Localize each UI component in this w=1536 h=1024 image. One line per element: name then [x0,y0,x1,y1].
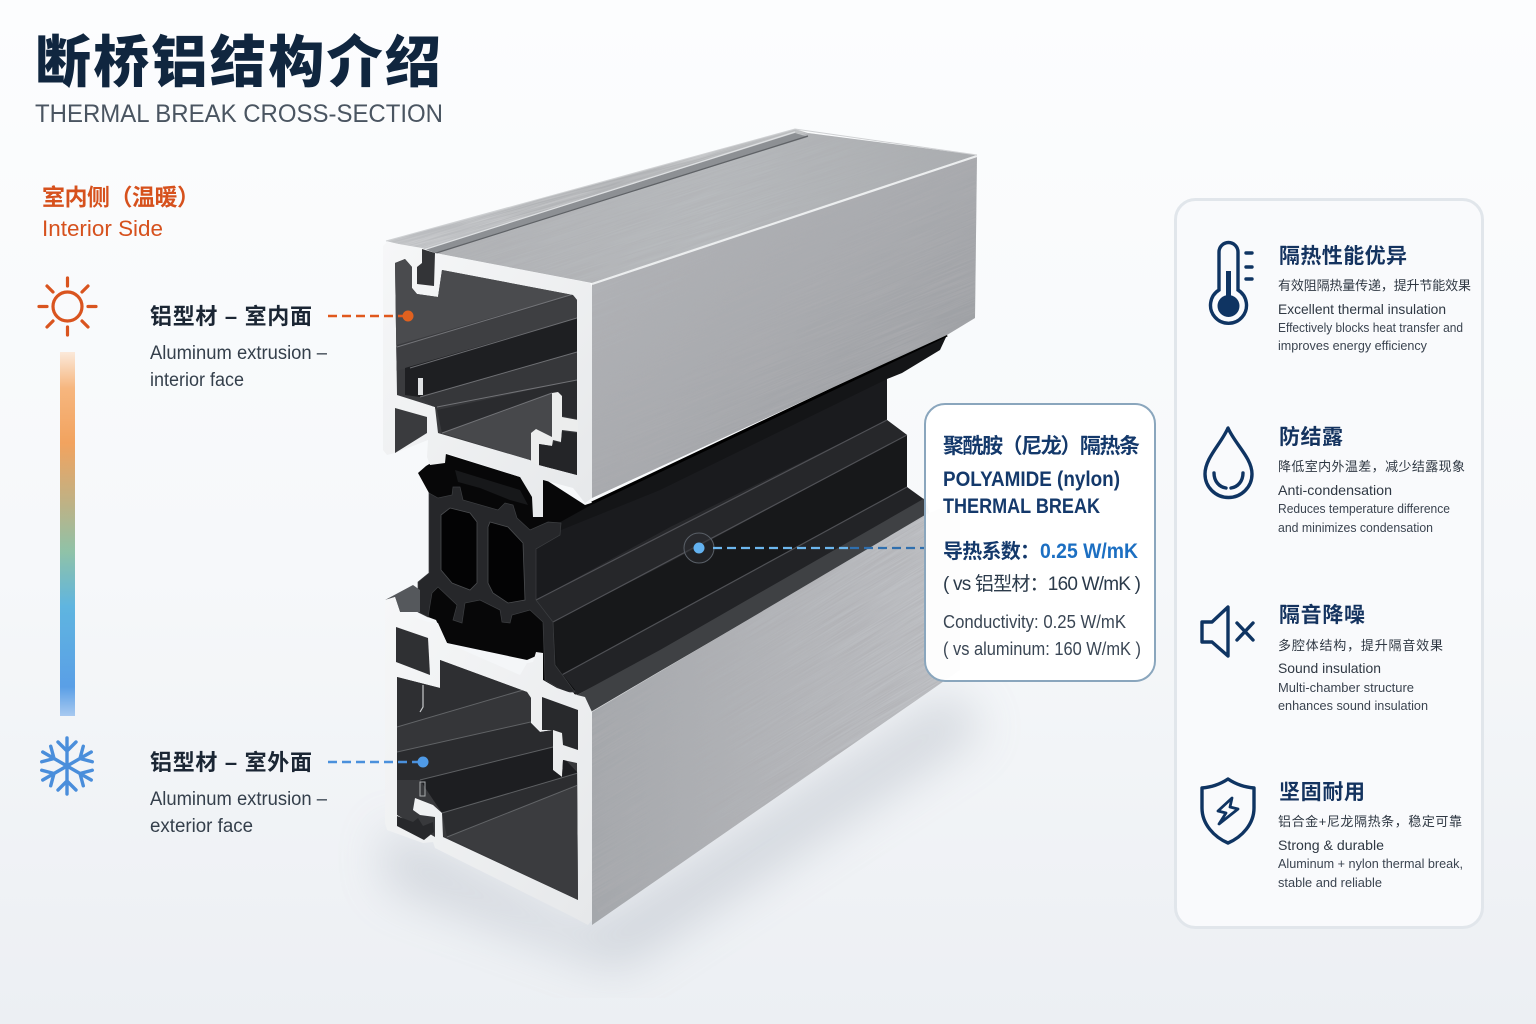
item: thermal insulation: 隔热性能优异 [1279,245,1407,268]
callout English heading [943,468,1120,518]
temperature gradient bar [60,352,75,716]
upper T post [531,392,578,466]
item: thermal insulation: improves energy efficiency [1278,339,1428,353]
interior side heading: Interior Side [42,216,163,241]
callout conductivity: 导热系数： [943,540,1040,563]
title: 断桥铝结构介绍 [35,31,441,94]
upper profile: right outer face [592,155,977,498]
lower aluminum front cross-section [385,597,592,925]
item: strong and durable: stable and reliable [1278,876,1382,890]
floor shadow [385,690,985,970]
item: strong and durable: 坚固耐用 [1279,781,1365,804]
lower chamber interior [397,660,578,900]
item: sound insulation: 多腔体结构，提升隔音效果 [1278,638,1443,653]
marker: exterior dot and leader [328,756,428,768]
callout conductivity: ( vs aluminum: 160 W/mK ) [943,638,1141,659]
item: sound insulation [1278,603,1443,713]
interior side heading: 室内侧（温暖） [42,184,200,210]
item: anti-condensation: 降低室内外温差，减少结露现象 [1278,459,1465,474]
polyamide strip rear sides [536,335,947,695]
top slot [417,249,435,286]
callout English heading: POLYAMIDE (nylon) [943,468,1120,491]
item: sound insulation: Multi-chamber structure [1278,681,1414,695]
upper chamber interior [395,259,577,475]
label: exterior aluminum extrusion: 铝型材 – 室外面 [150,750,312,775]
icon: water drop [1205,428,1252,497]
item: sound insulation: enhances sound insulation [1278,699,1428,713]
upper right chamber [562,396,577,419]
subtitle: THERMAL BREAK CROSS-SECTION [35,100,443,128]
callout conductivity: Conductivity: 0.25 W/mK [943,611,1127,632]
upper aluminum front cross-section [383,242,592,517]
callout conductivity: 0.25 W/mK [1040,540,1138,563]
item: anti-condensation: and minimizes condensation [1278,521,1433,535]
icon: sun [39,278,96,335]
upper profile: top face [386,128,977,283]
label: interior aluminum extrusion [150,304,327,391]
callout conductivity [943,540,1141,659]
label: exterior aluminum extrusion: Aluminum extrusion – [150,789,327,810]
item: sound insulation: 隔音降噪 [1279,603,1365,627]
icon: shield with bolt [1202,779,1254,843]
callout heading: 聚酰胺（尼龙）隔热条 [943,435,1140,458]
callout English heading: THERMAL BREAK [943,495,1100,518]
item: anti-condensation: 防结露 [1279,426,1343,449]
lower right top chamber [542,697,578,750]
aluminum thermal break profile illustration [328,0,1117,1024]
label: interior aluminum extrusion: Aluminum extrusion – [150,343,327,364]
item: anti-condensation [1278,426,1465,535]
item: thermal insulation [1278,245,1471,353]
item: strong and durable: 铝合金+尼龙隔热条，稳定可靠 [1278,814,1462,829]
item: strong and durable [1278,781,1463,890]
item: thermal insulation: Excellent thermal insulation [1278,301,1446,317]
black polyamide thermal break cross-section [418,454,600,692]
label: exterior aluminum extrusion [150,750,327,837]
upper left pocket [395,408,427,453]
lower profile top ledge [385,585,420,612]
black backing behind the web [418,454,600,690]
item: thermal insulation: 有效阻隔热量传递，提升节能效果 [1278,278,1471,293]
item: strong and durable: Strong & durable [1278,837,1384,853]
lower profile: right outer face [577,498,943,925]
label: interior aluminum extrusion: 铝型材 – 室内面 [150,304,312,329]
interior side heading [42,184,200,241]
web chambers [441,508,477,590]
marker: polyamide dot and leader [684,533,925,563]
callout: polyamide thermal break [925,404,1155,681]
label: interior aluminum extrusion: interior face [150,370,244,391]
callout conductivity: ( vs 铝型材：160 W/mK ) [943,573,1141,595]
icon: snowflake [38,738,96,794]
upper recess shading [455,470,528,505]
panel: benefits [1176,200,1482,928]
web body [418,487,575,692]
marker: interior dot and leader [328,310,414,322]
label: exterior aluminum extrusion: exterior face [150,816,253,837]
item: anti-condensation: Anti-condensation [1278,482,1392,498]
lower left top pocket [396,627,430,675]
lower left bottom pocket [397,816,434,840]
item: strong and durable: Aluminum + nylon thermal break, [1278,857,1463,871]
item: thermal insulation: Effectively blocks heat transfer and [1278,321,1463,335]
icon: thermometer [1210,242,1252,323]
item: anti-condensation: Reduces temperature difference [1278,502,1450,516]
item: sound insulation: Sound insulation [1278,660,1381,676]
icon: muted speaker [1202,607,1253,656]
